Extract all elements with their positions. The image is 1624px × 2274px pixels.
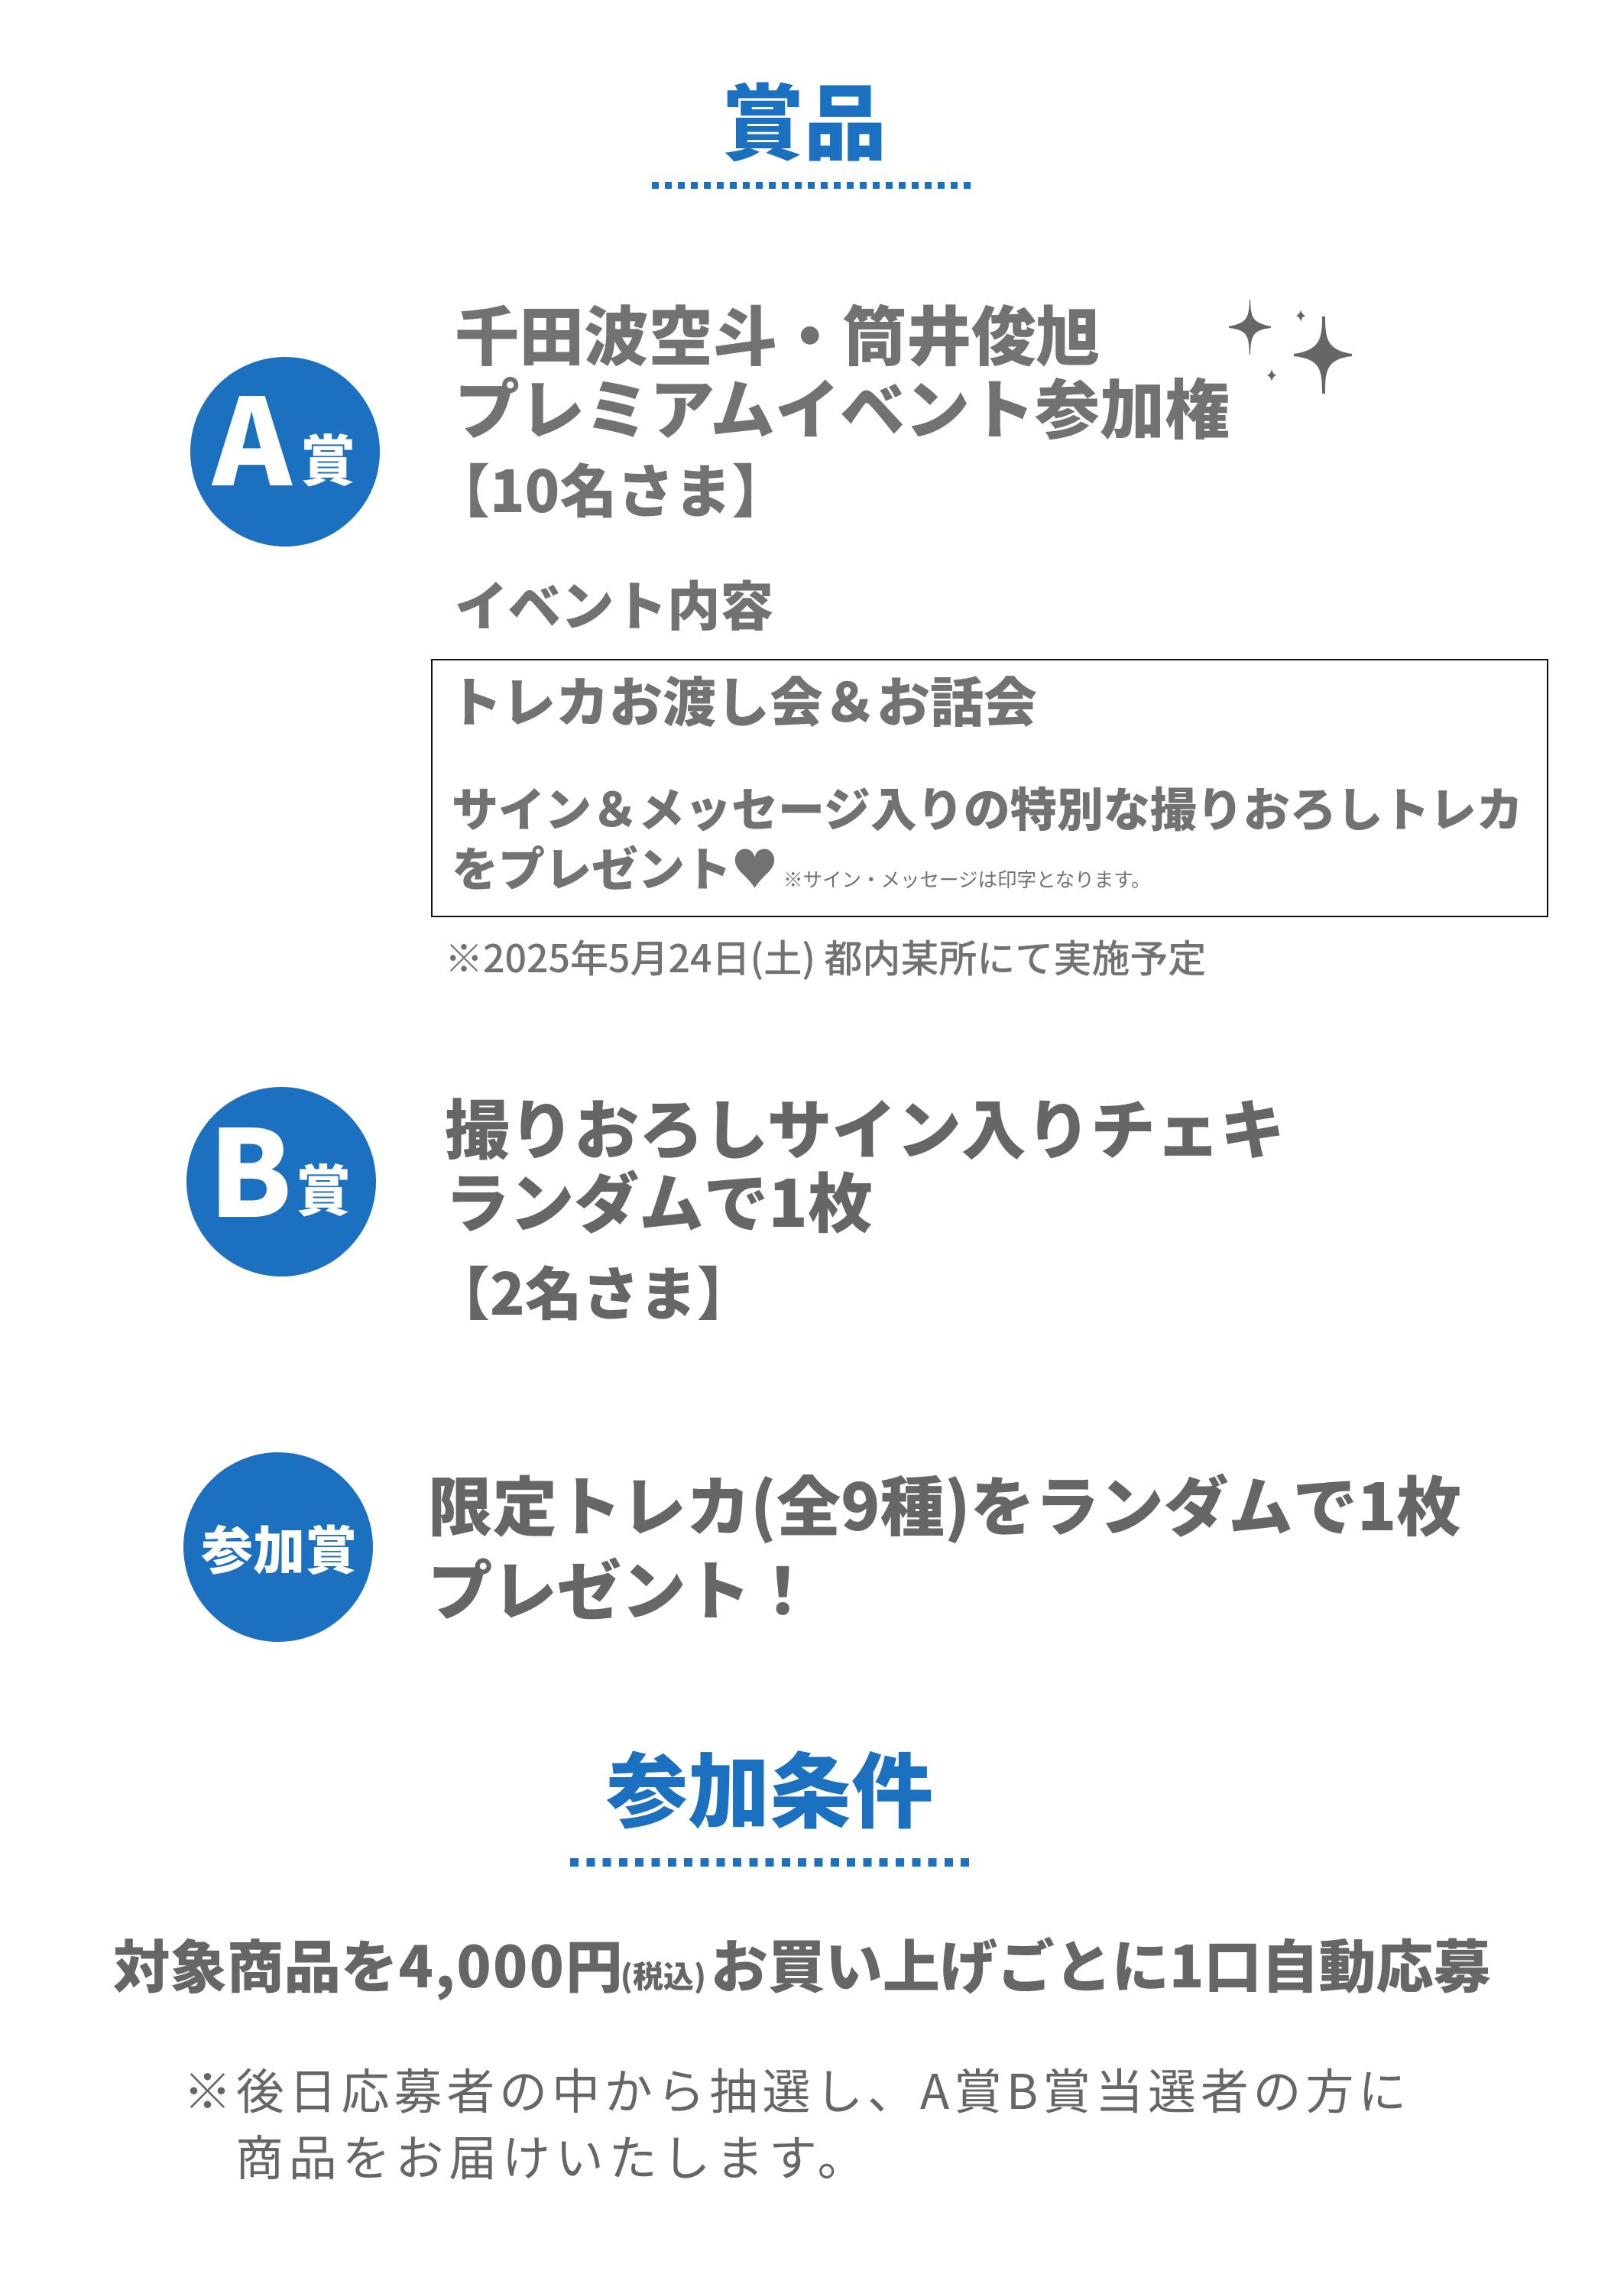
event description line 2: をプレゼント♥	[452, 832, 778, 900]
event date note: ※2025年5月24日(土) 都内某所にて実施予定	[445, 929, 1206, 984]
event description: サイン＆メッセージ入りの特別な撮りおろしトレカ	[452, 772, 1523, 840]
heading: prizes: 賞品	[721, 58, 887, 177]
B prize title	[445, 1079, 1285, 1246]
B prize winners count: 【2名さま】	[433, 1248, 754, 1332]
A prize title: 千田波空斗・筒井俊旭	[455, 286, 1100, 379]
participation prize title	[428, 1456, 1461, 1633]
panel: event details box	[431, 659, 1548, 917]
print note: ※サイン・メッセージは印字となります。	[783, 865, 1151, 893]
badge: B prize	[186, 1087, 376, 1276]
B prize title: 撮りおろしサイン入りチェキ	[445, 1079, 1285, 1173]
heading underline dots: conditions	[570, 1858, 975, 1867]
lottery note	[183, 2054, 1411, 2190]
badge label 参加賞: 参加賞	[201, 1509, 357, 1585]
badge letter A: A	[212, 347, 292, 521]
lottery note: ※後日応募者の中から抽選し、A賞B賞当選者の方に	[183, 2054, 1411, 2123]
B prize title: ランダムで1枚	[445, 1153, 873, 1246]
badge: participation prize	[183, 1452, 373, 1642]
heading underline dots: prizes	[652, 182, 971, 189]
event name: トレカお渡し会＆お話会	[449, 660, 1037, 738]
badge: A prize	[190, 357, 380, 547]
lottery note: 商品をお届けいたします。	[235, 2120, 870, 2190]
event heading: イベント内容	[455, 564, 773, 641]
icon: sparkles	[1229, 300, 1352, 394]
participation prize title: プレゼント！	[428, 1540, 815, 1633]
heading: entry conditions: 参加条件	[606, 1726, 933, 1844]
A prize title	[455, 286, 1230, 453]
participation prize title: 限定トレカ(全9種)をランダムで1枚	[428, 1456, 1461, 1549]
badge letter B: B	[209, 1079, 292, 1252]
conditions main line: 対象商品を4,000円(税込)お買い上げごとに1口自動応募	[113, 1921, 1491, 2004]
A prize winners count: 【10名さま】	[433, 446, 789, 529]
A prize title: プレミアムイベント参加権	[455, 358, 1230, 453]
badge label 賞: 賞	[296, 1147, 351, 1227]
badge label 賞: 賞	[300, 417, 355, 497]
